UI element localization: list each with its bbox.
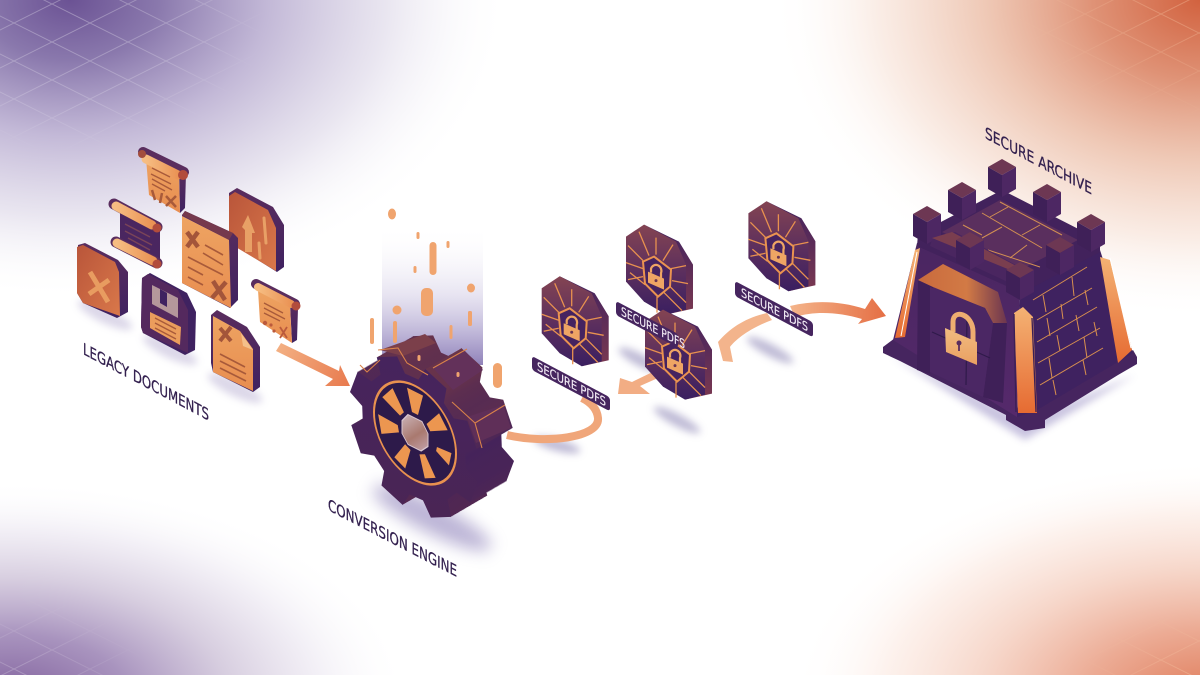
castle right wall	[1017, 250, 1133, 417]
label: secure pdfs 3	[735, 281, 813, 338]
label: secure pdfs 1: SECURE PDFS	[537, 360, 606, 410]
door seams	[932, 318, 990, 385]
label: secure pdfs 2: SECURE PDFS	[621, 305, 685, 353]
gear turbine	[374, 365, 456, 501]
icon: folded document	[211, 310, 260, 392]
arrow: curved from engine to first pdf	[507, 398, 598, 439]
castle plinth	[883, 338, 1137, 431]
icon: floppy disk	[141, 273, 196, 355]
castle left wall	[893, 243, 1020, 417]
icon: gear	[332, 303, 532, 550]
text: secure archive label: SECURE ARCHIVE	[985, 124, 1092, 199]
icon: large document	[182, 211, 238, 308]
particles	[370, 208, 502, 388]
arrow: curved from third pdf	[718, 313, 772, 362]
icon: x tile	[77, 243, 128, 318]
arrow: documents to engine	[276, 343, 350, 386]
gear edge highlights	[360, 348, 505, 448]
door arch	[917, 264, 1007, 403]
tile shadows	[532, 332, 796, 457]
icon: pdf tile 1	[542, 276, 609, 366]
arrow: lower pdf leftward	[618, 366, 667, 394]
panel: legacy documents cluster	[75, 150, 301, 425]
gear ground shadow	[366, 475, 498, 561]
icon: small scroll	[256, 284, 300, 343]
castle rim	[917, 190, 1100, 293]
brick lines	[1033, 267, 1103, 395]
icon: dark scroll	[114, 204, 162, 268]
icon: document shadows	[75, 295, 265, 408]
orange pillars	[895, 248, 1132, 413]
gear extrusion	[333, 303, 532, 550]
gear face	[332, 324, 496, 550]
icon: scroll top	[138, 150, 188, 213]
label: secure pdfs 2	[616, 301, 685, 353]
text: conversion engine label: CONVERSION ENGINE	[328, 496, 457, 582]
panel: conversion engine	[328, 208, 532, 582]
castle shadow	[890, 355, 1135, 440]
text: legacy documents label: LEGACY DOCUMENTS	[83, 340, 209, 425]
battlements front	[930, 232, 1074, 300]
roof floor	[942, 200, 1078, 270]
icon: pdf tile 2	[626, 225, 693, 315]
arrow: third pdf to archive	[790, 298, 886, 324]
gear tooth top faces	[380, 334, 511, 443]
icon: padlock	[945, 314, 977, 365]
panel: secure pdfs	[507, 201, 886, 457]
light beam	[382, 225, 483, 365]
panel: secure archive castle	[883, 124, 1137, 440]
label: secure pdfs 3: SECURE PDFS	[741, 286, 808, 335]
door	[930, 287, 993, 397]
icon: pdf tile 3	[748, 201, 815, 291]
battlements back	[913, 159, 1105, 252]
icon: pdf tile 4	[645, 310, 712, 400]
roof lines	[963, 202, 1062, 267]
icon: arrows tablet	[229, 188, 284, 272]
